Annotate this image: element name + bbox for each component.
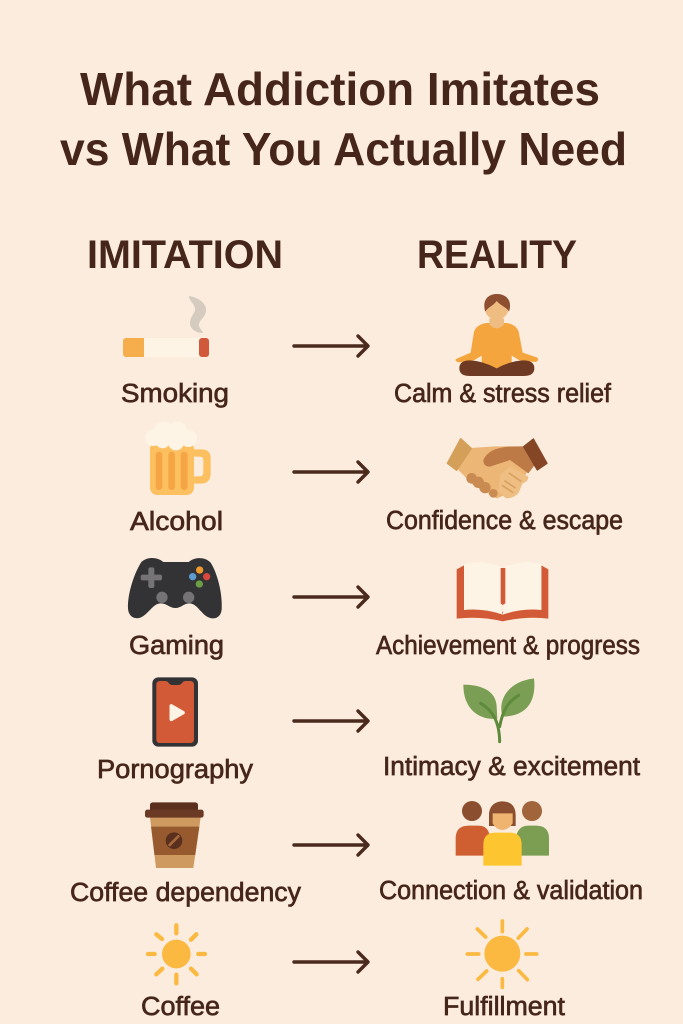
label: intimacy and excitement: Intimacy & excitement	[383, 753, 640, 781]
title: vs What You Actually Need	[60, 123, 627, 175]
label: coffee: Coffee	[141, 993, 220, 1021]
title	[60, 63, 627, 175]
icon: handshake	[447, 439, 547, 498]
label: fulfillment: Fulfillment	[443, 993, 565, 1021]
heading: imitation: IMITATION	[87, 233, 283, 277]
icon: beer mug	[145, 421, 211, 495]
icon: small sun	[148, 925, 205, 983]
icon: coffee cup	[145, 802, 204, 868]
label: alcohol: Alcohol	[130, 508, 223, 536]
icon: open book	[457, 562, 548, 621]
arrow 2	[294, 462, 368, 482]
label: achievement and progress: Achievement & progress	[376, 632, 640, 660]
icon: meditating person	[456, 294, 538, 376]
arrow 6	[294, 952, 368, 972]
icon: cigarette	[123, 296, 209, 357]
label: pornography: Pornography	[97, 756, 253, 784]
arrow 4	[294, 711, 368, 731]
icon: large sun	[467, 921, 537, 987]
label: smoking: Smoking	[121, 380, 229, 408]
icon: game controller	[128, 558, 222, 618]
arrow 3	[294, 587, 368, 607]
arrow 5	[294, 835, 368, 855]
title: What Addiction Imitates	[80, 63, 600, 115]
icon: green sprout	[463, 678, 534, 742]
heading: reality: REALITY	[417, 233, 577, 277]
icon: phone with play button	[152, 677, 198, 747]
icon: group of people	[456, 801, 549, 866]
label: calm and stress relief: Calm & stress relief	[394, 380, 612, 408]
arrow 1	[294, 336, 368, 356]
label: connection and validation: Connection & validation	[379, 877, 643, 905]
label: gaming: Gaming	[129, 632, 224, 660]
label: confidence and escape: Confidence & escape	[386, 507, 623, 535]
label: coffee dependency: Coffee dependency	[70, 879, 301, 907]
